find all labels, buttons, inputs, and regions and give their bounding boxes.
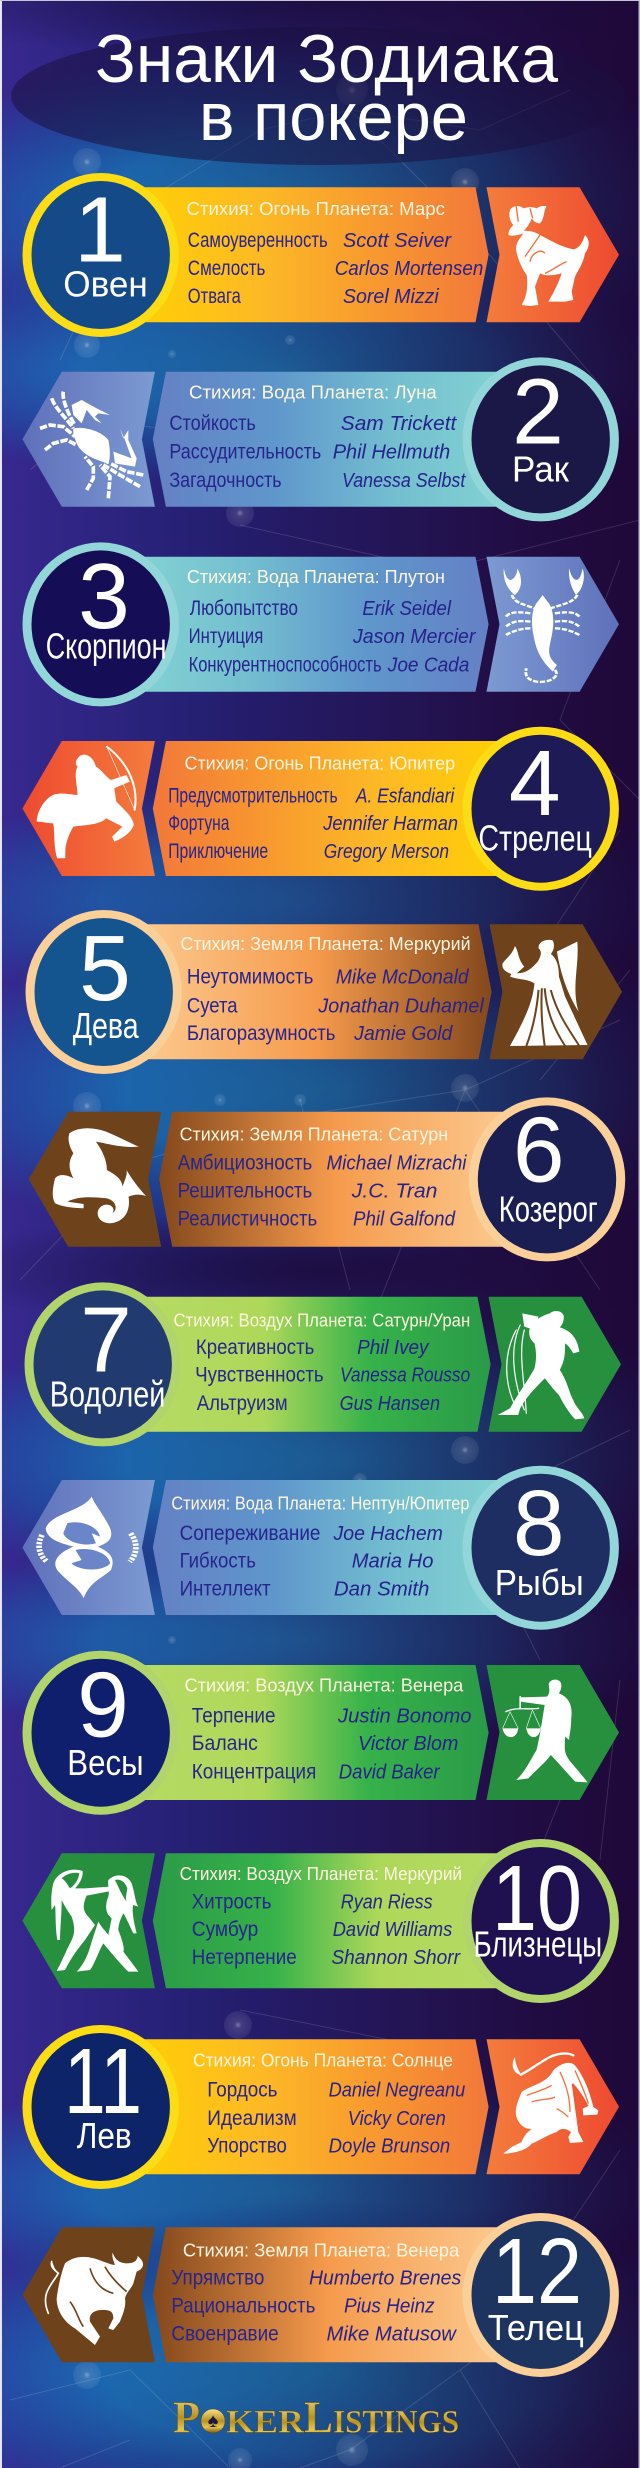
traits and players xyxy=(180,1864,462,1969)
icon: water bearer xyxy=(498,1311,584,1419)
traits and players: Интуиция xyxy=(189,625,263,648)
traits and players: Отвага xyxy=(188,285,241,308)
traits and players: Daniel Negreanu xyxy=(329,2080,465,2102)
title: Знаки Зодиака xyxy=(95,21,558,97)
icon: fishes xyxy=(39,1497,136,1598)
banner shapes xyxy=(22,542,619,706)
traits and players: Решительность xyxy=(178,1179,312,1202)
row 5: Дева xyxy=(26,910,622,1074)
traits and players: Michael Mizrachi xyxy=(326,1152,467,1174)
number and name xyxy=(499,1098,598,1230)
traits and players: Doyle Brunson xyxy=(329,2136,450,2158)
traits and players: David Williams xyxy=(333,1919,452,1941)
traits and players: Gregory Merson xyxy=(324,841,449,863)
banner shapes xyxy=(22,2025,619,2189)
traits and players: Maria Ho xyxy=(352,1551,433,1573)
icon: bull xyxy=(45,2253,143,2345)
traits and players: Альтруизм xyxy=(197,1392,288,1415)
traits and players: Стихия: Земля Планета: Сатурн xyxy=(180,1125,448,1145)
icon: archer xyxy=(37,747,136,858)
traits and players: J.C. Tran xyxy=(351,1180,438,1202)
logo: PokerListings: ISTINGS xyxy=(333,2404,459,2440)
row 9: Весы xyxy=(22,1651,619,1815)
traits and players: Стихия: Вода Планета: Нептун/Юпитер xyxy=(171,1493,469,1513)
number and name xyxy=(67,1653,144,1783)
number and name: Скорпион xyxy=(46,625,167,666)
traits and players: Неутомимость xyxy=(187,965,313,988)
traits and players: Стихия: Огонь Планета: Солнце xyxy=(193,2051,453,2071)
traits and players: Pius Heinz xyxy=(344,2296,435,2318)
traits and players: Phil Galfond xyxy=(353,1209,456,1231)
number and name: 7 xyxy=(80,1288,132,1392)
banner shapes xyxy=(22,1839,619,2003)
traits and players: Сопереживание xyxy=(180,1522,320,1545)
traits and players: Jonathan Duhamel xyxy=(317,995,484,1017)
logo: PokerListings: L xyxy=(304,2392,333,2442)
traits and players xyxy=(174,1311,470,1415)
traits and players: Хитрость xyxy=(192,1890,271,1913)
number and name: 5 xyxy=(79,916,131,1020)
number and name: Рыбы xyxy=(495,1562,584,1603)
traits and players: Erik Seidel xyxy=(362,598,452,620)
traits and players xyxy=(168,753,458,863)
row 7: Водолей xyxy=(24,1282,621,1446)
traits and players: Терпение xyxy=(192,1704,276,1727)
traits and players: Любопытство xyxy=(190,597,298,620)
traits and players: David Baker xyxy=(339,1761,441,1783)
traits and players: Justin Bonomo xyxy=(337,1705,472,1727)
row 10: Близнецы xyxy=(22,1839,619,2003)
traits and players: Jennifer Harman xyxy=(322,813,458,835)
number and name: 2 xyxy=(512,359,564,463)
banner shapes xyxy=(22,727,619,891)
traits and players: Благоразумность xyxy=(187,1022,336,1045)
number and name: 8 xyxy=(513,1471,565,1575)
traits and players xyxy=(187,567,477,677)
traits and players: Конкурентноспособность xyxy=(189,654,382,677)
icon: twins xyxy=(51,1870,138,1972)
number and name: 11 xyxy=(64,2029,142,2133)
traits and players: Фортуна xyxy=(168,812,230,835)
traits and players: Стихия: Воздух Планета: Меркурий xyxy=(180,1864,462,1884)
traits and players: Своенравие xyxy=(171,2323,279,2346)
traits and players: Гордось xyxy=(207,2079,278,2102)
traits and players: Сумбур xyxy=(192,1918,258,1941)
traits and players: Рассудительность xyxy=(169,440,321,463)
traits and players: Суета xyxy=(187,994,238,1017)
traits and players: A. Esfandiari xyxy=(355,786,455,808)
number and name: Овен xyxy=(63,264,148,305)
number and name xyxy=(73,916,139,1046)
number and name: 4 xyxy=(509,731,561,835)
traits and players: Jamie Gold xyxy=(353,1023,453,1045)
traits and players: Vicky Coren xyxy=(348,2108,446,2130)
traits and players: Carlos Mortensen xyxy=(335,258,483,280)
number and name: Рак xyxy=(512,448,569,490)
number and name xyxy=(46,544,167,666)
number and name xyxy=(495,1471,584,1603)
number and name: 1 xyxy=(74,178,126,282)
traits and players: Нетерпение xyxy=(192,1946,297,1969)
banner shapes xyxy=(29,1097,625,1261)
number and name: 9 xyxy=(77,1653,129,1757)
traits and players: Vanessa Selbst xyxy=(342,470,467,492)
row 12: Телец xyxy=(22,2213,619,2377)
traits and players: Стихия: Вода Планета: Плутон xyxy=(187,567,445,587)
traits and players: Стихия: Земля Планета: Венера xyxy=(183,2241,460,2261)
traits and players: Концентрация xyxy=(192,1760,316,1783)
number and name: Стрелец xyxy=(478,818,592,859)
traits and players: Ryan Riess xyxy=(341,1891,433,1913)
traits and players: Gus Hansen xyxy=(340,1393,440,1415)
traits and players: Загадочность xyxy=(169,469,282,492)
number and name: Лев xyxy=(77,2115,132,2156)
row 8: Рыбы xyxy=(22,1466,619,1630)
traits and players: Стихия: Земля Планета: Меркурий xyxy=(180,934,471,954)
traits and players: Mike McDonald xyxy=(336,966,469,988)
traits and players: Humberto Brenes xyxy=(309,2267,461,2289)
traits and players: Чувственность xyxy=(195,1364,324,1387)
banner shapes xyxy=(22,2213,619,2377)
number and name: Козерог xyxy=(499,1189,598,1230)
traits and players: Стихия: Воздух Планета: Сатурн/Уран xyxy=(174,1311,470,1331)
traits and players: Гибкость xyxy=(180,1550,256,1573)
traits and players: Идеализм xyxy=(207,2107,297,2130)
traits and players xyxy=(169,382,467,492)
traits and players: Приключение xyxy=(168,840,268,863)
traits and players: Рациональность xyxy=(171,2295,315,2318)
row 2: Рак xyxy=(22,357,619,521)
traits and players: Стихия: Воздух Планета: Венера xyxy=(184,1676,464,1696)
traits and players: Mike Matusow xyxy=(326,2324,457,2346)
number and name xyxy=(50,1288,165,1415)
logo: PokerListings: P xyxy=(173,2392,200,2442)
traits and players xyxy=(171,2241,461,2346)
icon: scales xyxy=(503,1680,588,1782)
icon: virgin xyxy=(502,940,588,1046)
traits and players: Стихия: Вода Планета: Луна xyxy=(189,382,438,402)
traits and players: Упрямство xyxy=(171,2266,264,2289)
traits and players: Shannon Shorr xyxy=(331,1947,461,1969)
number and name: Весы xyxy=(67,1742,144,1783)
row 1: Овен xyxy=(22,173,619,337)
traits and players: Victor Blom xyxy=(358,1733,458,1755)
banner shapes xyxy=(22,173,619,337)
number and name xyxy=(478,731,592,859)
traits and players: Стихия: Огонь Планета: Юпитер xyxy=(184,753,455,773)
traits and players: Самоуверенность xyxy=(188,229,328,252)
row 6: Козерог xyxy=(29,1097,625,1261)
number and name xyxy=(64,2029,142,2156)
title xyxy=(11,21,625,165)
number and name: 12 xyxy=(492,2219,582,2323)
banner shapes xyxy=(22,1466,619,1630)
traits and players: Смелость xyxy=(188,257,265,280)
traits and players: Упорство xyxy=(207,2135,287,2158)
number and name: 3 xyxy=(78,544,130,648)
traits and players xyxy=(171,1493,469,1601)
title: в покере xyxy=(199,79,468,155)
number and name: Дева xyxy=(73,1005,139,1046)
traits and players: Предусмотрительность xyxy=(168,785,338,808)
number and name: 10 xyxy=(492,1846,582,1950)
logo: PokerListings xyxy=(173,2392,459,2442)
traits and players: Креативность xyxy=(196,1336,314,1359)
number and name: Близнецы xyxy=(474,1924,602,1965)
traits and players: Sorel Mizzi xyxy=(343,286,439,308)
banner shapes xyxy=(22,357,619,521)
logo: PokerListings: KER xyxy=(226,2404,305,2440)
traits and players: Реалистичность xyxy=(178,1208,317,1231)
icon: ram xyxy=(508,205,589,306)
traits and players: Амбициозность xyxy=(178,1151,312,1174)
row 11: Лев xyxy=(22,2025,619,2189)
traits and players: Стихия: Огонь Планета: Марс xyxy=(186,199,445,219)
traits and players: Phil Hellmuth xyxy=(333,441,450,463)
row 3: Скорпион xyxy=(22,542,619,706)
traits and players: Sam Trickett xyxy=(341,413,458,435)
logo: PokerListings: ♠ xyxy=(208,2410,219,2432)
traits and players xyxy=(180,934,484,1045)
traits and players xyxy=(184,1676,472,1783)
row 4: Стрелец xyxy=(22,727,619,891)
banner shapes xyxy=(22,1651,619,1815)
banner shapes xyxy=(26,910,622,1074)
icon: scorpion xyxy=(504,568,584,682)
number and name: Водолей xyxy=(50,1374,165,1415)
traits and players: Баланс xyxy=(192,1732,258,1755)
banner shapes xyxy=(24,1282,621,1446)
traits and players: Dan Smith xyxy=(334,1579,429,1601)
traits and players: Joe Hachem xyxy=(333,1523,443,1545)
traits and players: Joe Cada xyxy=(387,655,469,677)
traits and players: Vanessa Rousso xyxy=(340,1365,470,1387)
traits and players xyxy=(186,199,483,308)
number and name xyxy=(63,178,148,305)
traits and players: Phil Ivey xyxy=(357,1337,429,1359)
traits and players: Стойкость xyxy=(169,412,256,435)
traits and players: Scott Seiver xyxy=(343,230,452,252)
traits and players: Интеллект xyxy=(180,1578,271,1601)
icon: goat xyxy=(53,1128,146,1223)
number and name: 6 xyxy=(513,1098,565,1202)
traits and players xyxy=(193,2051,465,2158)
icon: lion xyxy=(503,2054,598,2154)
number and name: Телец xyxy=(488,2307,584,2348)
icon: crab xyxy=(40,392,143,498)
traits and players xyxy=(178,1125,467,1231)
traits and players: Jason Mercier xyxy=(352,626,477,648)
